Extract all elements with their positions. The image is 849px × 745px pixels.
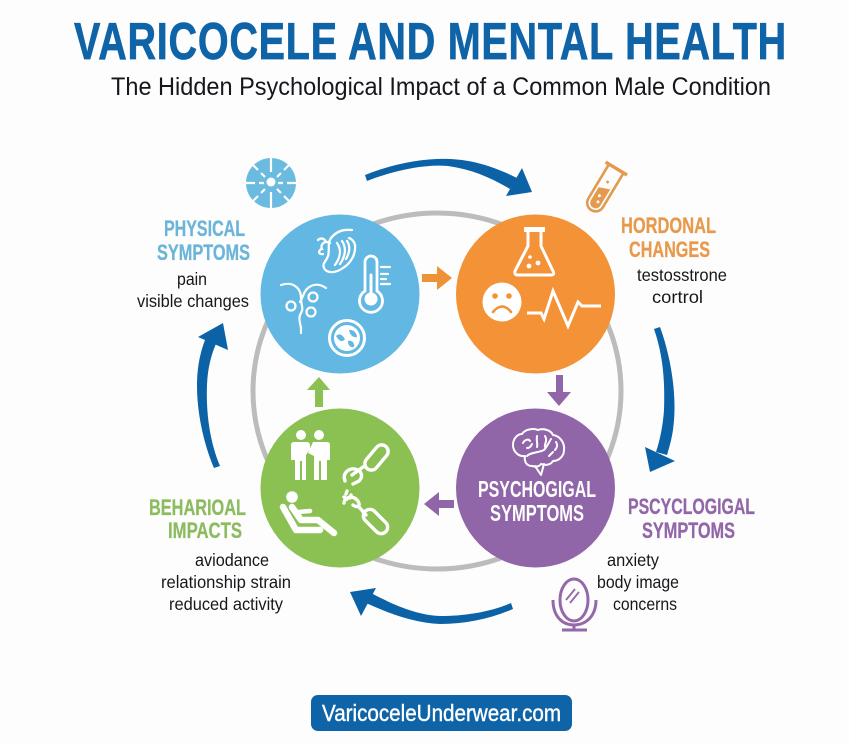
text: behavioral impacts label: BEHARIOAL xyxy=(149,495,246,520)
text: hormonal changes label: cortrol xyxy=(652,287,703,307)
text: hormonal changes label: testosstrone xyxy=(637,265,727,285)
footer button: VaricoceleUnderwear.com xyxy=(322,700,561,726)
icon: flask xyxy=(515,230,554,275)
footer button xyxy=(311,695,572,731)
text: psychological symptoms label: anxiety xyxy=(607,550,659,570)
text: hormonal changes label: CHANGES xyxy=(629,237,710,262)
panel: behavioral circle xyxy=(260,408,420,568)
central gray ring xyxy=(253,213,621,569)
text: hormonal changes label xyxy=(621,213,727,307)
text: behavioral impacts label: IMPACTS xyxy=(168,518,242,543)
arrow: blue to orange xyxy=(422,266,452,290)
text: behavioral impacts label: relationship strain xyxy=(161,572,291,592)
icon: nerve branches xyxy=(281,284,326,333)
text: physical symptoms label: PHYSICAL xyxy=(164,216,245,241)
icon: mirror xyxy=(553,579,596,630)
icon: radial sun xyxy=(246,158,296,208)
text: in-circle heading: PSYCHOGIGAL xyxy=(478,476,596,502)
icon: two people xyxy=(291,430,330,480)
arrow: right cycle arrow xyxy=(645,327,675,472)
text: physical symptoms label: SYMPTOMS xyxy=(157,240,250,265)
text: behavioral impacts label: aviodance xyxy=(195,550,269,570)
text: psychological symptoms label: body image xyxy=(597,572,679,592)
text: psychological symptoms label: PSCYCLOGIGAL xyxy=(628,494,755,519)
icon: brain xyxy=(513,429,564,475)
text: in-circle heading xyxy=(478,476,596,526)
icon: sad face xyxy=(482,282,522,322)
subtitle: The Hidden Psychological Impact of a Common Male Condition xyxy=(111,73,771,101)
text: psychological symptoms label: concerns xyxy=(613,594,677,614)
icon: cell disc xyxy=(330,320,364,356)
arrow: bottom cycle arrow xyxy=(350,588,513,624)
icon: broken chain xyxy=(344,442,391,536)
text: behavioral impacts label xyxy=(149,495,291,614)
panel: physical circle xyxy=(260,214,420,374)
arrow: orange to purple xyxy=(547,375,571,406)
arrow: top cycle arrow xyxy=(365,159,532,196)
text: behavioral impacts label: reduced activity xyxy=(169,594,283,614)
text: psychological symptoms label: SYMPTOMS xyxy=(642,518,735,543)
panel: psychological circle xyxy=(456,408,615,568)
icon: thermometer xyxy=(360,256,390,312)
icon: reclining person xyxy=(283,491,334,533)
text: physical symptoms label: visible changes xyxy=(137,291,249,311)
text: physical symptoms label: pain xyxy=(177,269,207,289)
arrow: green to blue xyxy=(307,377,330,407)
icon: test tube xyxy=(581,162,627,217)
text: physical symptoms label xyxy=(137,216,250,311)
icon: pulse line xyxy=(527,291,601,326)
arrow: left cycle arrow xyxy=(197,323,228,468)
arrow: purple to green xyxy=(424,492,454,516)
text: hormonal changes label: HORDONAL xyxy=(621,213,716,238)
text: psychological symptoms label xyxy=(597,494,755,614)
icon: stomach xyxy=(318,230,355,272)
text: in-circle heading: SYMPTOMS xyxy=(490,500,584,526)
panel: hormonal circle xyxy=(456,214,615,374)
